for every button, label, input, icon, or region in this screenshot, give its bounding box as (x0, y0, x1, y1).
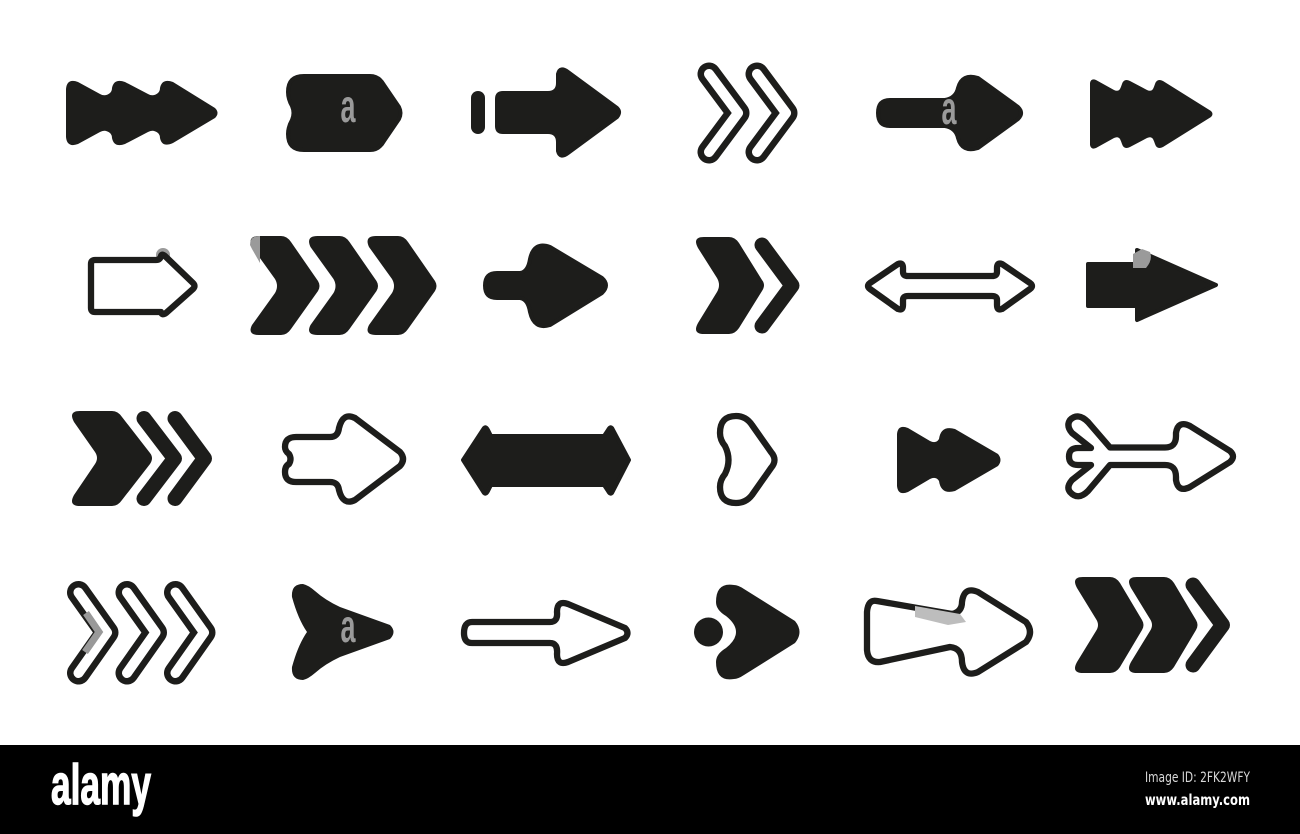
icon: round-shaft arrow (878, 77, 1021, 149)
icon: cursor arrowhead: a (340, 600, 356, 652)
icon: double outline chevrons (709, 74, 786, 152)
icon: rounded badge arrow (288, 76, 400, 150)
icon: outline arrow with notched tail (285, 416, 403, 502)
alamy logo: alamy (51, 753, 151, 817)
icon: fletched outline arrow (1068, 416, 1233, 496)
icon: triple sharp arrow (1090, 79, 1212, 149)
icon: outline block arrow (91, 248, 194, 314)
icon: chevron with two slim chevrons (72, 411, 204, 506)
icon: double-headed outline arrow (868, 264, 1032, 310)
icon: rounded badge arrow: a (340, 80, 356, 132)
icon: tapered outline arrow (867, 590, 1030, 674)
icon: fast-forward arrow (897, 427, 1000, 493)
icon: sharp block arrow (1088, 249, 1216, 320)
website: www.alamy.com (1145, 791, 1250, 809)
icon: round-shaft arrow: a (942, 82, 957, 134)
icon: triple outline chevrons (78, 592, 204, 673)
icon: bar and arrow (471, 69, 619, 156)
icon: thin outline arrow (464, 603, 628, 663)
icon: cursor arrowhead (292, 584, 394, 680)
icon: triple toothed arrow (66, 81, 218, 145)
icon: stubby bold arrow (485, 246, 606, 326)
icon: chevron with slim chevron (696, 237, 792, 334)
icon: dot and rounded arrowhead (694, 585, 800, 679)
image id: Image ID: 2FK2WFY (1145, 770, 1250, 786)
icon: two bold chevrons and a slim chevron (1075, 577, 1222, 673)
footer bar (0, 745, 1300, 834)
icon: double-headed filled arrow (463, 427, 629, 494)
icon: heart-shaped outline arrow (720, 416, 774, 503)
icon: triple bold chevrons (250, 236, 436, 335)
